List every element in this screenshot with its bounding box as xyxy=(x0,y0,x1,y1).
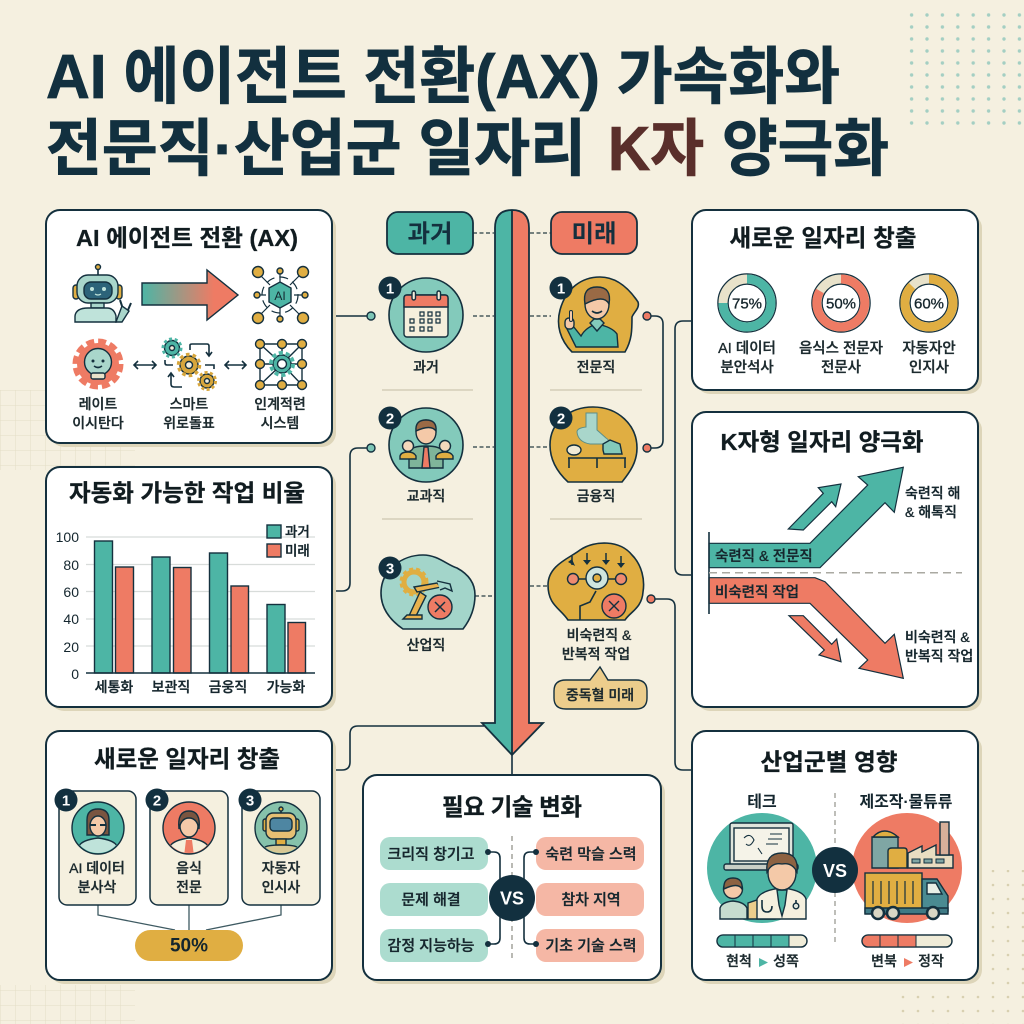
card 3: 자동자 xyxy=(262,860,300,876)
panel: new jobs cards xyxy=(46,731,336,984)
label: gear: 레이트 xyxy=(79,396,117,412)
donut 75%: 75% xyxy=(732,296,762,312)
future item 3: routine work: 반복적 작업 xyxy=(562,646,630,662)
heading: 산업군별 영향 xyxy=(760,749,898,775)
lower labels: 비숙련직 & xyxy=(905,629,970,645)
arrow: downward xyxy=(709,578,903,678)
label: tech: 테크 xyxy=(747,793,777,811)
legend: 과거 xyxy=(285,524,310,540)
upper labels: & 해톡직 xyxy=(905,504,957,520)
central timeline arrow xyxy=(482,210,543,755)
progress bar: tech: 성쪽 xyxy=(773,953,799,969)
title: AI 에이전트 전환(AX) 가속화와 xyxy=(46,43,840,112)
bar chart: 금웅직 xyxy=(209,679,247,695)
progress bar: manufacturing: 변북 xyxy=(871,953,897,969)
past item 3: industrial robot: 산업직 xyxy=(407,637,445,653)
arrow: transition xyxy=(142,270,238,320)
donut 60% xyxy=(902,279,956,376)
card 2: 2 xyxy=(153,792,161,810)
left skills: 크리직 창기고 xyxy=(388,846,475,863)
donut 75%: 분안석사 xyxy=(720,359,774,376)
upper labels: 숙련직 해 xyxy=(905,485,960,501)
heading: 자동화 가능한 작업 비율 xyxy=(69,480,305,506)
donut 50% xyxy=(799,279,883,376)
future item 2: finance: 금융직 xyxy=(577,488,615,504)
arrow: bidirectional xyxy=(134,361,156,369)
progress bar: tech: 현척 xyxy=(726,953,752,969)
arrow: upward xyxy=(709,467,903,568)
right skills: 참차 지역 xyxy=(561,892,621,908)
icon: robot xyxy=(73,264,131,322)
label: gear: 이시탄다 xyxy=(72,415,124,431)
past item 1: calendar: 과거 xyxy=(413,359,439,375)
label: smart: 위로돌표 xyxy=(163,415,215,431)
bar chart: 80 xyxy=(63,557,79,573)
pill: 50%: 50% xyxy=(170,936,208,956)
label: manufacturing: 제조작·물튜류 xyxy=(860,793,953,811)
future badge xyxy=(551,212,637,254)
card 2: 전문 xyxy=(176,879,202,895)
label: system xyxy=(254,396,306,431)
past item 1: calendar xyxy=(378,276,463,375)
past item 2: teacher: 교과직 xyxy=(407,488,445,504)
past item 1: calendar: 1 xyxy=(386,280,394,298)
left skills xyxy=(380,837,488,962)
title: 양극화 xyxy=(722,115,889,184)
donut 75%: AI 데이터 xyxy=(718,340,776,357)
vs badge xyxy=(489,875,535,921)
future badge: 미래 xyxy=(571,220,617,248)
right skills: 숙련 막슬 스력 xyxy=(545,846,637,863)
past badge xyxy=(387,212,473,254)
illustration: tech xyxy=(707,813,817,923)
bar chart: 100 xyxy=(56,529,79,545)
card 3 xyxy=(238,788,320,905)
progress bar: manufacturing: 정작 xyxy=(918,953,944,969)
future item 2: finance: 2 xyxy=(557,410,565,428)
card 1: AI 데이터 xyxy=(69,860,125,876)
panel: impact by industry xyxy=(692,731,982,984)
future item 2: finance xyxy=(550,406,637,504)
pill: 50% xyxy=(135,930,243,961)
future item 1: professional: 전문직 xyxy=(577,359,615,375)
arrow: small upward xyxy=(788,484,841,530)
bar chart: 보관직 xyxy=(152,679,190,695)
callout: future xyxy=(554,667,647,709)
donut 50%: 음식스 전문자 xyxy=(799,340,883,357)
icon: AI network: AI xyxy=(274,289,286,303)
panel: AI agent transition xyxy=(46,210,336,447)
past badge: 과거 xyxy=(407,220,453,248)
bar chart: 20 xyxy=(63,639,79,655)
callout: future: 중독혈 미래 xyxy=(566,687,634,703)
donut 50%: 전문사 xyxy=(821,359,861,376)
right skills xyxy=(536,837,644,962)
card 3: 3 xyxy=(246,792,254,810)
arrow: bidirectional xyxy=(225,361,246,369)
vs badge xyxy=(812,847,858,893)
bar chart: 40 xyxy=(63,611,79,627)
lower labels xyxy=(715,584,973,664)
icon: connected system xyxy=(256,340,306,390)
heading: K자형 일자리 양극화 xyxy=(720,429,924,455)
panel: K-shaped polarization xyxy=(692,412,982,711)
right skills: 기초 기술 스력 xyxy=(545,938,637,954)
panel: required skills xyxy=(363,775,665,984)
vs badge: VS xyxy=(823,861,847,881)
upper labels xyxy=(715,485,960,565)
future item 3: routine work xyxy=(548,543,644,662)
bar chart: 세통화 xyxy=(95,679,133,695)
card 1: 1 xyxy=(62,792,70,810)
dividers xyxy=(382,390,642,519)
title xyxy=(46,43,889,184)
donut 75% xyxy=(718,279,776,376)
past item 3: industrial robot xyxy=(378,555,475,653)
past item 3: industrial robot: 3 xyxy=(386,560,394,578)
panel: new jobs donuts xyxy=(692,210,982,394)
title: 전문직·산업군 일자리 xyxy=(46,115,586,184)
card 2: 음식 xyxy=(176,860,202,876)
arrow: small downward xyxy=(789,616,841,662)
donut 50%: 50% xyxy=(826,296,856,312)
card 2 xyxy=(146,788,228,905)
heading: 새로운 일자리 창출 xyxy=(730,225,916,251)
icon: smart gears xyxy=(163,339,216,390)
label: system: 인계적련 xyxy=(254,396,306,412)
heading: 새로운 일자리 창출 xyxy=(94,746,280,772)
left skills: 문제 해결 xyxy=(401,892,461,908)
heading: AI 에이전트 전환 (AX) xyxy=(76,225,298,251)
lower labels: 반복직 작업 xyxy=(905,648,973,664)
progress bar: manufacturing xyxy=(862,935,952,969)
donut 60%: 자동자안 xyxy=(902,340,956,357)
legend xyxy=(267,524,310,558)
connectors xyxy=(485,849,539,947)
bar chart: 0 xyxy=(71,666,79,682)
label: system: 시스템 xyxy=(261,415,299,431)
panel: automation ratio chart xyxy=(46,467,336,711)
card 1 xyxy=(54,788,136,905)
illustration: manufacturing xyxy=(852,813,962,923)
vs badge: VS xyxy=(500,888,524,908)
connector lines xyxy=(332,316,692,775)
legend: 미래 xyxy=(285,544,310,558)
lower labels: 비숙련직 작업 xyxy=(715,584,799,601)
card 3: 인시사 xyxy=(262,879,300,895)
future item 1: professional xyxy=(550,276,638,375)
label: smart: 스마트 xyxy=(170,396,208,412)
left skills: 감정 지능하능 xyxy=(388,938,475,954)
icon: AI network xyxy=(252,266,308,324)
past item 2: teacher xyxy=(378,406,463,504)
future item 1: professional: 1 xyxy=(557,280,565,298)
future item 3: routine work: 비숙련직 & xyxy=(567,627,632,643)
heading: 필요 기술 변화 xyxy=(442,794,582,820)
bar chart: 60 xyxy=(63,584,79,600)
past item 2: teacher: 2 xyxy=(386,410,394,428)
donut 60%: 인지사 xyxy=(909,359,949,376)
bar chart xyxy=(56,529,315,695)
title: K자 xyxy=(608,115,704,184)
label: smart xyxy=(163,396,215,431)
donut 60%: 60% xyxy=(914,296,944,312)
upper labels: 숙련직 & 전문직 xyxy=(715,548,813,565)
label: gear xyxy=(72,396,124,431)
card 1: 분사삭 xyxy=(78,879,116,895)
progress bar: tech xyxy=(717,935,807,969)
bar chart: 가능화 xyxy=(267,679,305,695)
connectors to pill xyxy=(98,905,281,930)
icon: gear robot face xyxy=(75,341,121,387)
